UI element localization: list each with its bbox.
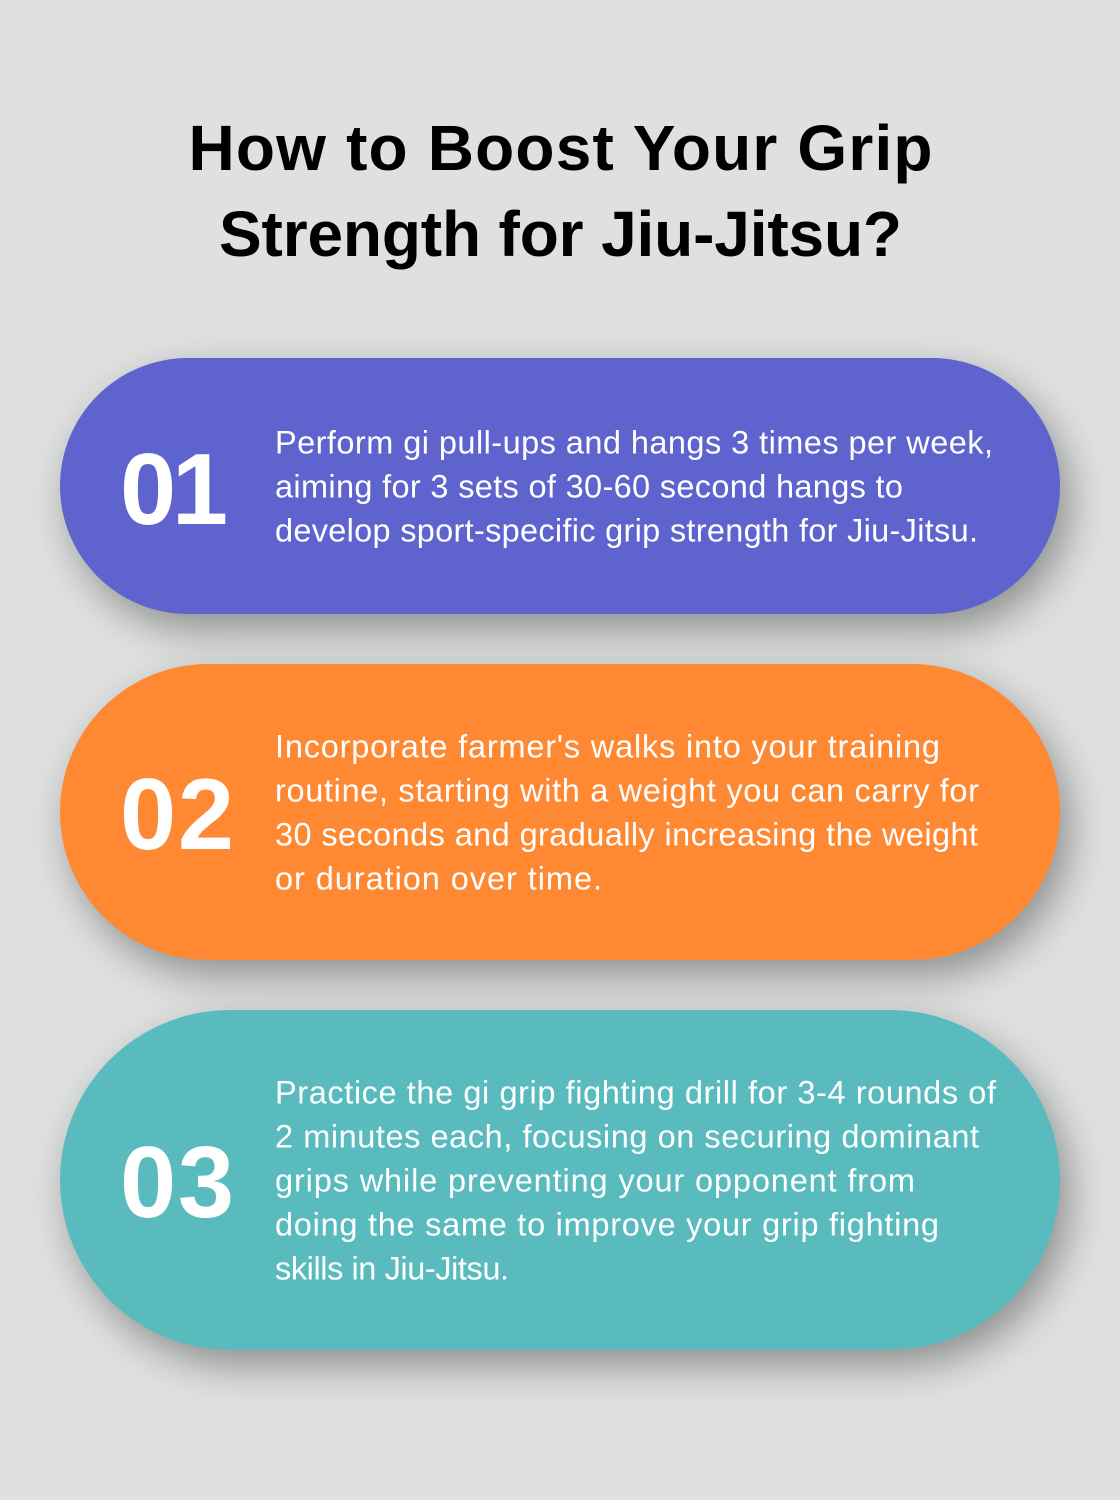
text: step 02 description: [275, 728, 979, 896]
text: step 03 description: 2 minutes each, focusing on securing dominant: [275, 1118, 979, 1154]
panel: step 02: [60, 664, 1060, 960]
text: step 02 description: Incorporate farmer's walks into your training: [275, 728, 940, 764]
text: step 03 description: [275, 1074, 997, 1286]
number 03: 03: [120, 1127, 234, 1239]
text: step 01 description: [275, 424, 993, 548]
text: step 02 description: routine, starting with a weight you can carry for: [275, 772, 979, 808]
text: step 02 description: 30 seconds and gradually increasing the weight: [275, 816, 978, 852]
text: step 01 description: Perform gi pull-ups and hangs 3 times per week,: [275, 424, 993, 460]
text: step 03 description: skills in Jiu-Jitsu.: [275, 1250, 509, 1286]
number 02: 02: [120, 759, 234, 871]
number 01: 01: [120, 434, 228, 546]
title: [188, 112, 932, 270]
title: Strength for Jiu-Jitsu?: [219, 198, 902, 270]
text: step 03 description: grips while preventing your opponent from: [275, 1162, 915, 1198]
text: step 01 description: develop sport-specific grip strength for Jiu-Jitsu.: [275, 512, 978, 548]
panel: step 01: [60, 358, 1060, 614]
text: step 02 description: or duration over time.: [275, 860, 602, 896]
text: step 03 description: Practice the gi grip fighting drill for 3-4 rounds of: [275, 1074, 997, 1110]
text: step 03 description: doing the same to improve your grip fighting: [275, 1206, 939, 1242]
panel: step 03: [60, 1010, 1060, 1350]
title: How to Boost Your Grip: [188, 112, 932, 184]
text: step 01 description: aiming for 3 sets of 30-60 second hangs to: [275, 468, 903, 504]
